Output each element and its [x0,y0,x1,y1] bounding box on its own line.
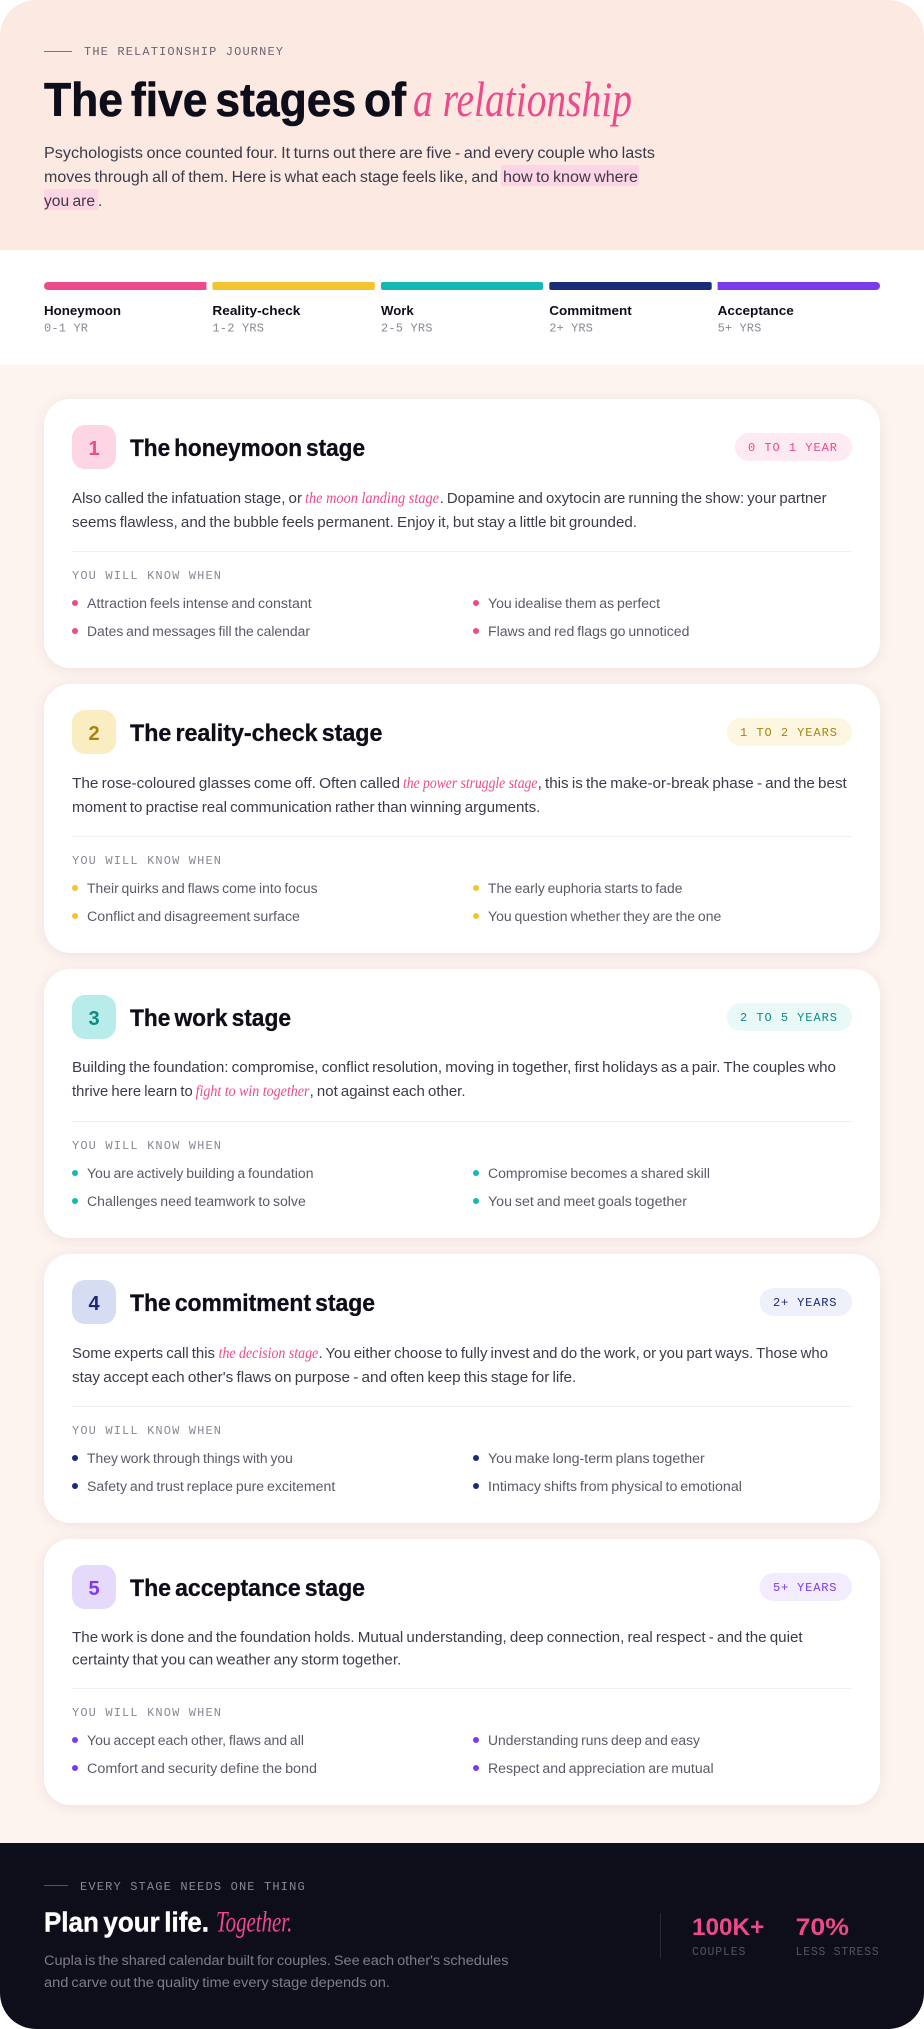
timeline strip [0,250,924,365]
stage label: reality-check: 1-2 YRS [212,322,264,336]
panel: stage 1 honeymoon [44,399,880,668]
stage label: commitment: Commitment [549,303,632,318]
stage label: reality-check: Reality-check [212,303,301,318]
number badge 4 [72,1280,116,1324]
stat: couples [692,1914,764,1959]
you will know when list: Comfort and security define the bond [87,1761,317,1776]
description: Also called the infatuation stage, or [72,491,302,507]
footer description: Cupla is the shared calendar built for couples. See each other's schedules [44,1953,509,1968]
description: Building the foundation: compromise, conflict resolution, moving in together, first holidays as a pair. The couples who [72,1060,836,1076]
description [72,775,847,816]
heading: The work stage [130,1005,291,1032]
description: thrive here learn to [72,1084,193,1100]
stat: couples: 100K+ [692,1914,764,1941]
duration pill: 0 TO 1 YEAR [748,441,837,455]
footer description: and carve out the quality time every stage depends on. [44,1975,390,1990]
panel: stage 2 reality-check [44,684,880,953]
title: The five stages of [44,73,406,126]
duration pill [760,1288,852,1316]
intro text: moves through all of them. Here is what each stage feels like, and [44,169,498,186]
header panel [0,0,924,250]
intro text [44,145,655,210]
panel: stage 3 work [44,969,880,1238]
you will know when list: The early euphoria starts to fade [488,881,682,896]
description: The rose-coloured glasses come off. Often called [72,776,400,792]
you will know when list [72,1706,714,1776]
stage label: commitment [549,303,632,336]
number badge 5 [72,1565,116,1609]
duration pill: 1 TO 2 YEARS [740,726,837,740]
stage label: reality-check [212,303,301,336]
stage label: work: Work [381,303,414,318]
description [72,1060,836,1100]
description: the moon landing stage [305,490,439,507]
number badge 2: 2 [88,723,100,745]
heading: The honeymoon stage [130,435,365,462]
footer eyebrow: EVERY STAGE NEEDS ONE THING [80,1880,305,1894]
description: fight to win together [196,1083,310,1100]
description: stay accept each other's flaws on purpose - and often keep this stage for life. [72,1370,576,1386]
number badge 4: 4 [88,1293,100,1315]
description: . You either choose to fully invest and do the work, or you part ways. Those who [318,1346,828,1362]
you will know when list: Their quirks and flaws come into focus [87,881,318,896]
description [72,490,827,531]
you will know when list: You are actively building a foundation [87,1166,314,1181]
you will know when list: Challenges need teamwork to solve [87,1194,306,1209]
you will know when list: You set and meet goals together [488,1194,688,1209]
duration pill: 5+ YEARS [773,1581,836,1595]
number badge 3: 3 [88,1008,100,1030]
you will know when list: You make long-term plans together [488,1451,705,1466]
description: seems flawless, and the bubble feels permanent. Enjoy it, but stay a little bit grounded. [72,515,637,531]
number badge 3 [72,995,116,1039]
number badge 1: 1 [88,438,100,460]
you will know when list: Dates and messages fill the calendar [87,624,311,639]
stage label: acceptance [718,303,794,336]
you will know when list: Understanding runs deep and easy [488,1733,700,1748]
description: certainty that you can weather any storm together. [72,1652,401,1668]
duration pill [727,718,852,746]
you will know when list: You question whether they are the one [488,909,721,924]
stat: couples: COUPLES [692,1946,745,1959]
you will know when list: Compromise becomes a shared skill [488,1166,710,1181]
description: the decision stage [219,1345,318,1362]
stage label: honeymoon [44,303,121,336]
number badge 2 [72,710,116,754]
footer panel [0,1843,924,2029]
number badge 1 [72,425,116,469]
you will know when list: Attraction feels intense and constant [87,596,312,611]
footer description [44,1953,509,1990]
title: a relationship [413,71,632,127]
heading: The commitment stage [130,1290,375,1317]
description: . Dopamine and oxytocin are running the show: your partner [440,491,827,507]
you will know when list: You accept each other, flaws and all [87,1733,304,1748]
stage label: commitment: 2+ YRS [549,322,593,336]
description [72,1345,828,1386]
intro text: Psychologists once counted four. It turns out there are five - and every couple who lasts [44,145,655,162]
you will know when list: YOU WILL KNOW WHEN [72,1139,221,1153]
stat: less stress: 70% [796,1914,849,1941]
description: the power struggle stage [403,775,537,792]
you will know when list: Safety and trust replace pure excitement [87,1479,336,1494]
stat: less stress: LESS STRESS [796,1946,879,1959]
duration pill: 2 TO 5 YEARS [740,1011,837,1025]
you will know when list: They work through things with you [87,1451,293,1466]
you will know when list [72,569,689,639]
intro text: . [98,193,102,210]
heading: The acceptance stage [130,1575,365,1602]
you will know when list: Conflict and disagreement surface [87,909,300,924]
footer headline: Together. [216,1906,292,1938]
duration pill [735,433,852,461]
stage label: work [381,303,432,336]
intro text: you are [44,193,95,210]
description: , this is the make-or-break phase - and the best [538,776,847,792]
description [72,1630,803,1668]
number badge 5: 5 [88,1578,100,1600]
stage label: acceptance: 5+ YRS [718,322,761,336]
you will know when list: Flaws and red flags go unnoticed [488,624,689,639]
you will know when list [72,854,721,924]
footer headline [44,1906,292,1938]
stage label: honeymoon: Honeymoon [44,303,121,318]
heading: The reality-check stage [130,720,382,747]
footer headline: Plan your life. [44,1906,209,1938]
stat: less stress [796,1914,879,1959]
you will know when list [72,1424,742,1494]
duration pill [760,1573,852,1601]
you will know when list: YOU WILL KNOW WHEN [72,569,221,583]
you will know when list: YOU WILL KNOW WHEN [72,1424,221,1438]
you will know when list: Respect and appreciation are mutual [488,1761,714,1776]
you will know when list: YOU WILL KNOW WHEN [72,1706,221,1720]
panel: stage 5 acceptance [44,1539,880,1805]
stage label: honeymoon: 0-1 YR [44,322,88,336]
you will know when list: YOU WILL KNOW WHEN [72,854,221,868]
you will know when list: Intimacy shifts from physical to emotional [488,1479,742,1494]
stage label: work: 2-5 YRS [381,322,432,336]
you will know when list: You idealise them as perfect [488,596,660,611]
duration pill [727,1003,852,1031]
eyebrow: THE RELATIONSHIP JOURNEY [84,45,283,59]
stage label: acceptance: Acceptance [718,303,794,318]
description: , not against each other. [310,1084,466,1100]
description: Some experts call this [72,1346,215,1362]
you will know when list [72,1139,710,1209]
intro text: how to know where [503,169,638,186]
title [44,71,632,127]
description: moment to practise real communication rather than winning arguments. [72,800,540,816]
duration pill: 2+ YEARS [773,1296,836,1310]
panel: stage 4 commitment [44,1254,880,1523]
description: The work is done and the foundation holds. Mutual understanding, deep connection, real respect - and the quiet [72,1630,803,1646]
